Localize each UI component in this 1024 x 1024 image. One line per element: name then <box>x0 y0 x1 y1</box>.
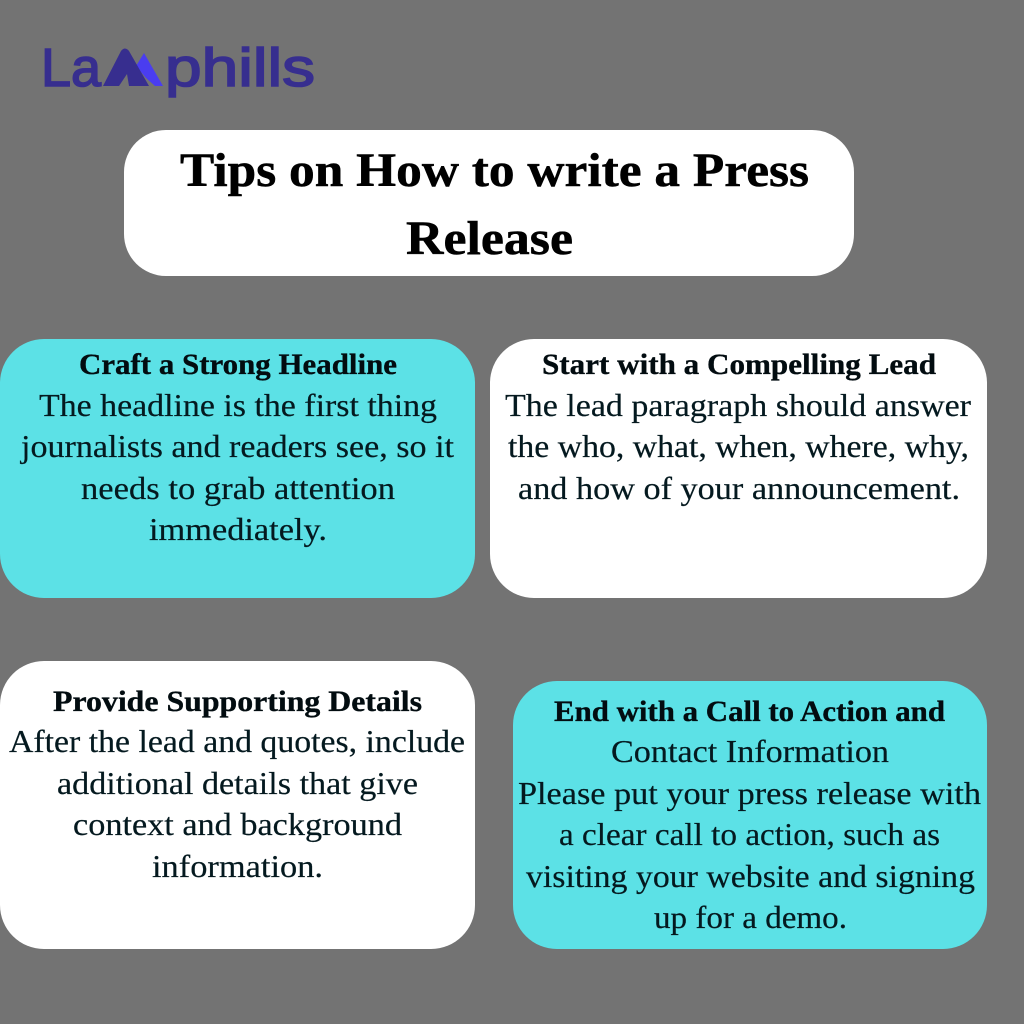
text block: context and background <box>73 806 402 842</box>
heading: End with a Call to Action and <box>554 695 945 728</box>
text block: After the lead and quotes, include <box>9 723 465 759</box>
heading: Provide Supporting Details <box>53 685 422 718</box>
text block: and how of your announcement. <box>518 470 960 506</box>
icon: mountain peaks <box>103 48 163 86</box>
text block: Please put your press release with <box>518 775 981 811</box>
heading: Craft a Strong Headline <box>79 348 397 381</box>
text block <box>20 387 454 547</box>
text block: Contact Information <box>611 733 889 769</box>
text block: additional details that give <box>57 765 418 801</box>
text block: needs to grab attention <box>81 470 395 506</box>
panel: Provide Supporting Details <box>0 661 475 949</box>
title: Release <box>406 212 573 265</box>
panel: Craft a Strong Headline <box>0 339 475 598</box>
text block <box>9 723 465 884</box>
text block <box>518 733 981 935</box>
title: Tips on How to write a Press <box>180 144 809 197</box>
logo: Lamphills: La <box>41 38 102 98</box>
text block: The headline is the first thing <box>39 387 437 423</box>
panel: Start with a Compelling Lead <box>490 339 987 598</box>
text block: visiting your website and signing <box>526 858 975 894</box>
text block: The lead paragraph should answer <box>505 387 971 423</box>
text block: immediately. <box>149 511 327 547</box>
text block: a clear call to action, such as <box>559 816 940 852</box>
title panel <box>124 130 854 276</box>
text block: up for a demo. <box>654 899 847 935</box>
text block: the who, what, when, where, why, <box>508 428 969 464</box>
heading: Start with a Compelling Lead <box>542 348 936 381</box>
title <box>180 144 809 265</box>
logo: Lamphills: phills <box>165 38 315 98</box>
text block: information. <box>152 848 323 884</box>
text block <box>505 387 971 506</box>
logo: Lamphills <box>41 38 315 98</box>
text block: journalists and readers see, so it <box>20 428 454 464</box>
panel: End with a Call to Action <box>513 681 987 949</box>
